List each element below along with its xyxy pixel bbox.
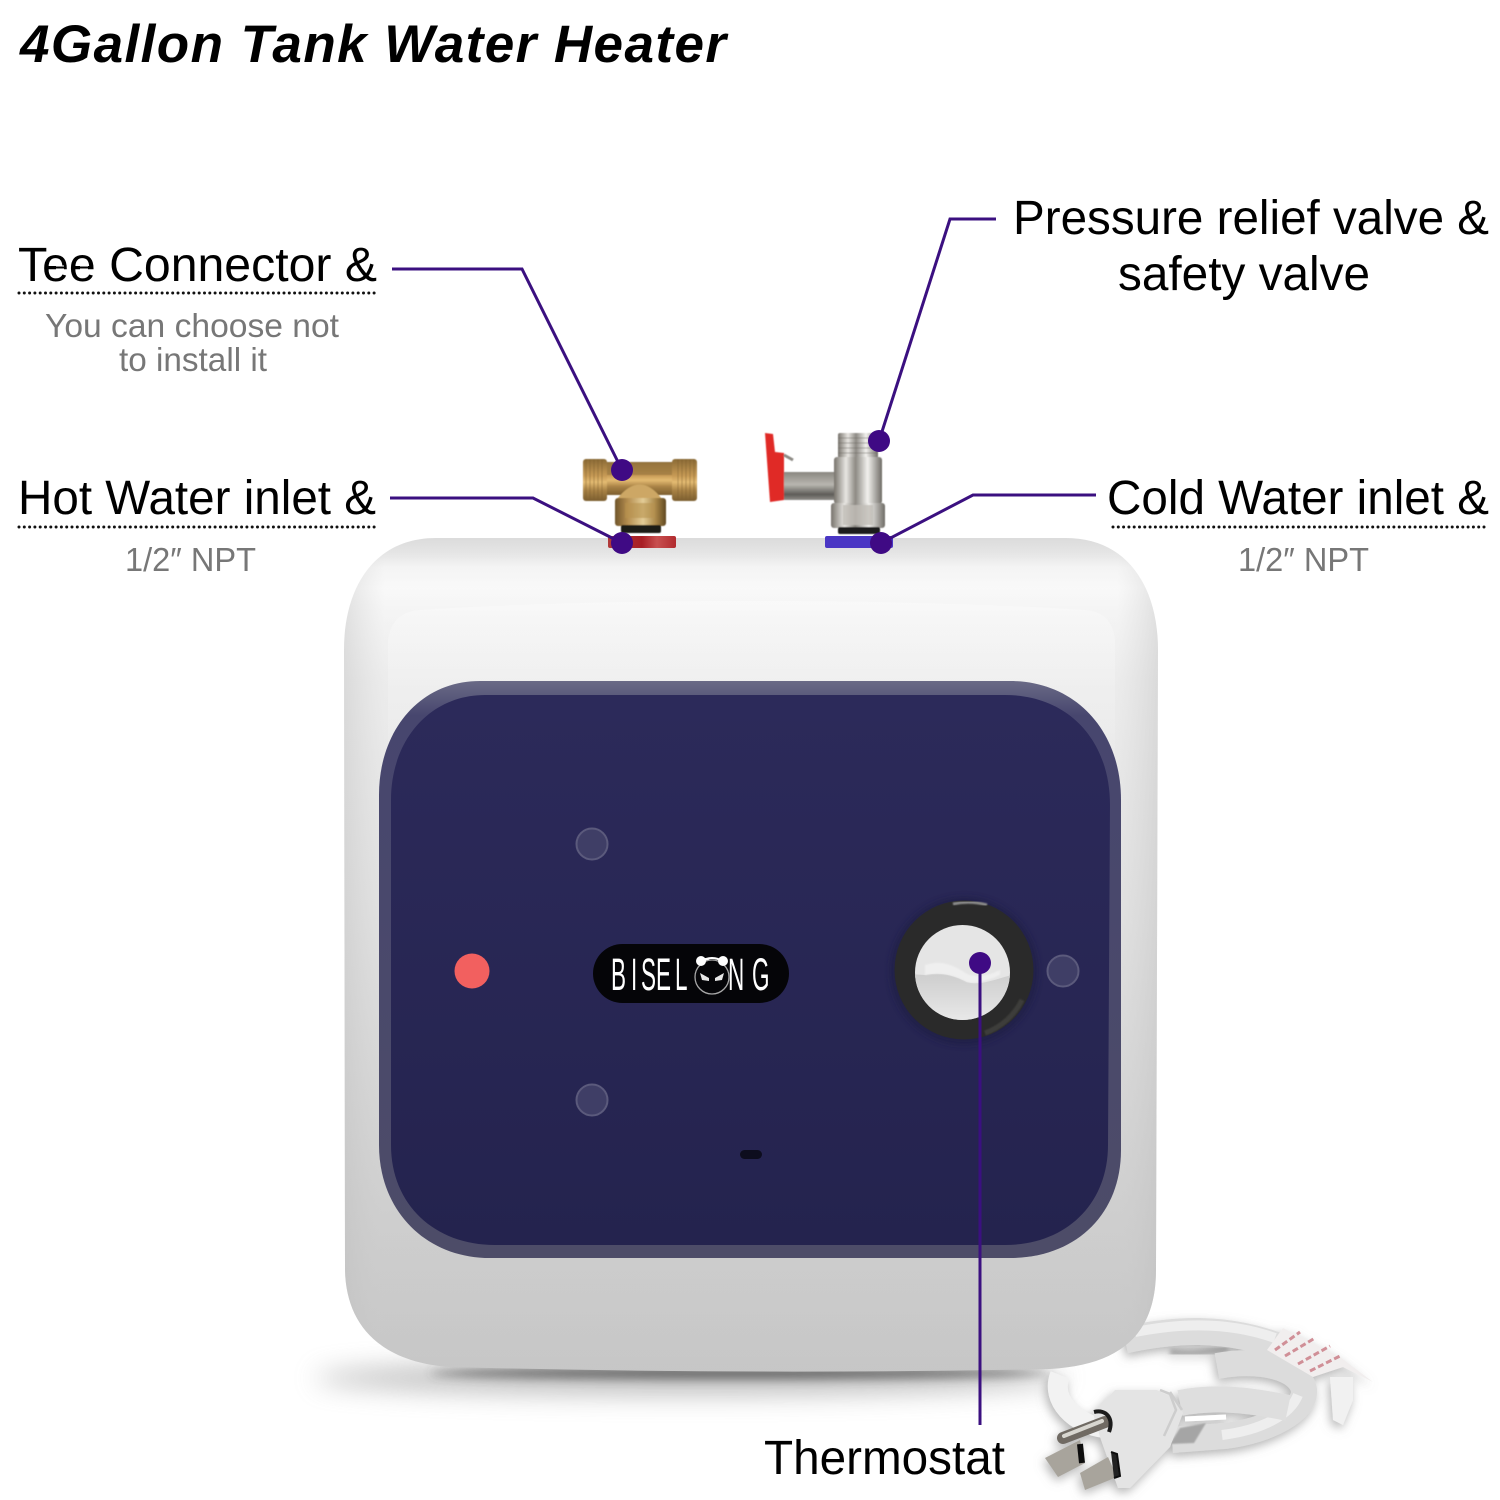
callout: tee connector: Tee Connector & <box>18 239 377 292</box>
indicator buttons <box>576 828 1078 1116</box>
callout: pressure relief valve <box>868 192 1489 452</box>
tank body <box>340 535 1162 1377</box>
brand logo <box>593 944 789 1003</box>
callout: pressure relief valve: Pressure relief valve & <box>1013 192 1489 245</box>
pressure relief valve fitting <box>765 433 885 534</box>
callout: pressure relief valve: safety valve <box>1118 248 1370 301</box>
callout: tee connector: You can choose not <box>45 307 339 344</box>
callout: cold water inlet <box>870 472 1489 578</box>
thermostat knob <box>890 897 1038 1045</box>
red indicator light <box>454 954 490 988</box>
callout: thermostat <box>764 952 1005 1485</box>
floor shadow <box>315 1362 1065 1394</box>
tee connector fitting <box>583 459 697 533</box>
callout: hot water inlet <box>18 472 633 578</box>
drain slot <box>740 1150 762 1159</box>
power cord and plug <box>1045 1325 1373 1490</box>
callout: tee connector: to install it <box>119 341 267 378</box>
callout: tee connector <box>18 239 633 481</box>
brand logo: BISELONG <box>611 950 770 1000</box>
callout: cold water inlet: 1/2″ NPT <box>1238 541 1369 578</box>
callout: hot water inlet: Hot Water inlet & <box>18 472 376 525</box>
title: 4Gallon Tank Water Heater <box>19 15 729 74</box>
hot water flange <box>608 536 676 548</box>
callout: thermostat: Thermostat <box>764 1432 1005 1485</box>
front control panel <box>379 681 1121 1258</box>
plug <box>1045 1390 1183 1490</box>
callout: cold water inlet: Cold Water inlet & <box>1107 472 1489 525</box>
callout: hot water inlet: 1/2″ NPT <box>125 541 256 578</box>
water heater illustration <box>315 433 1373 1490</box>
cold water flange <box>825 536 893 548</box>
cord tag <box>1267 1328 1373 1425</box>
